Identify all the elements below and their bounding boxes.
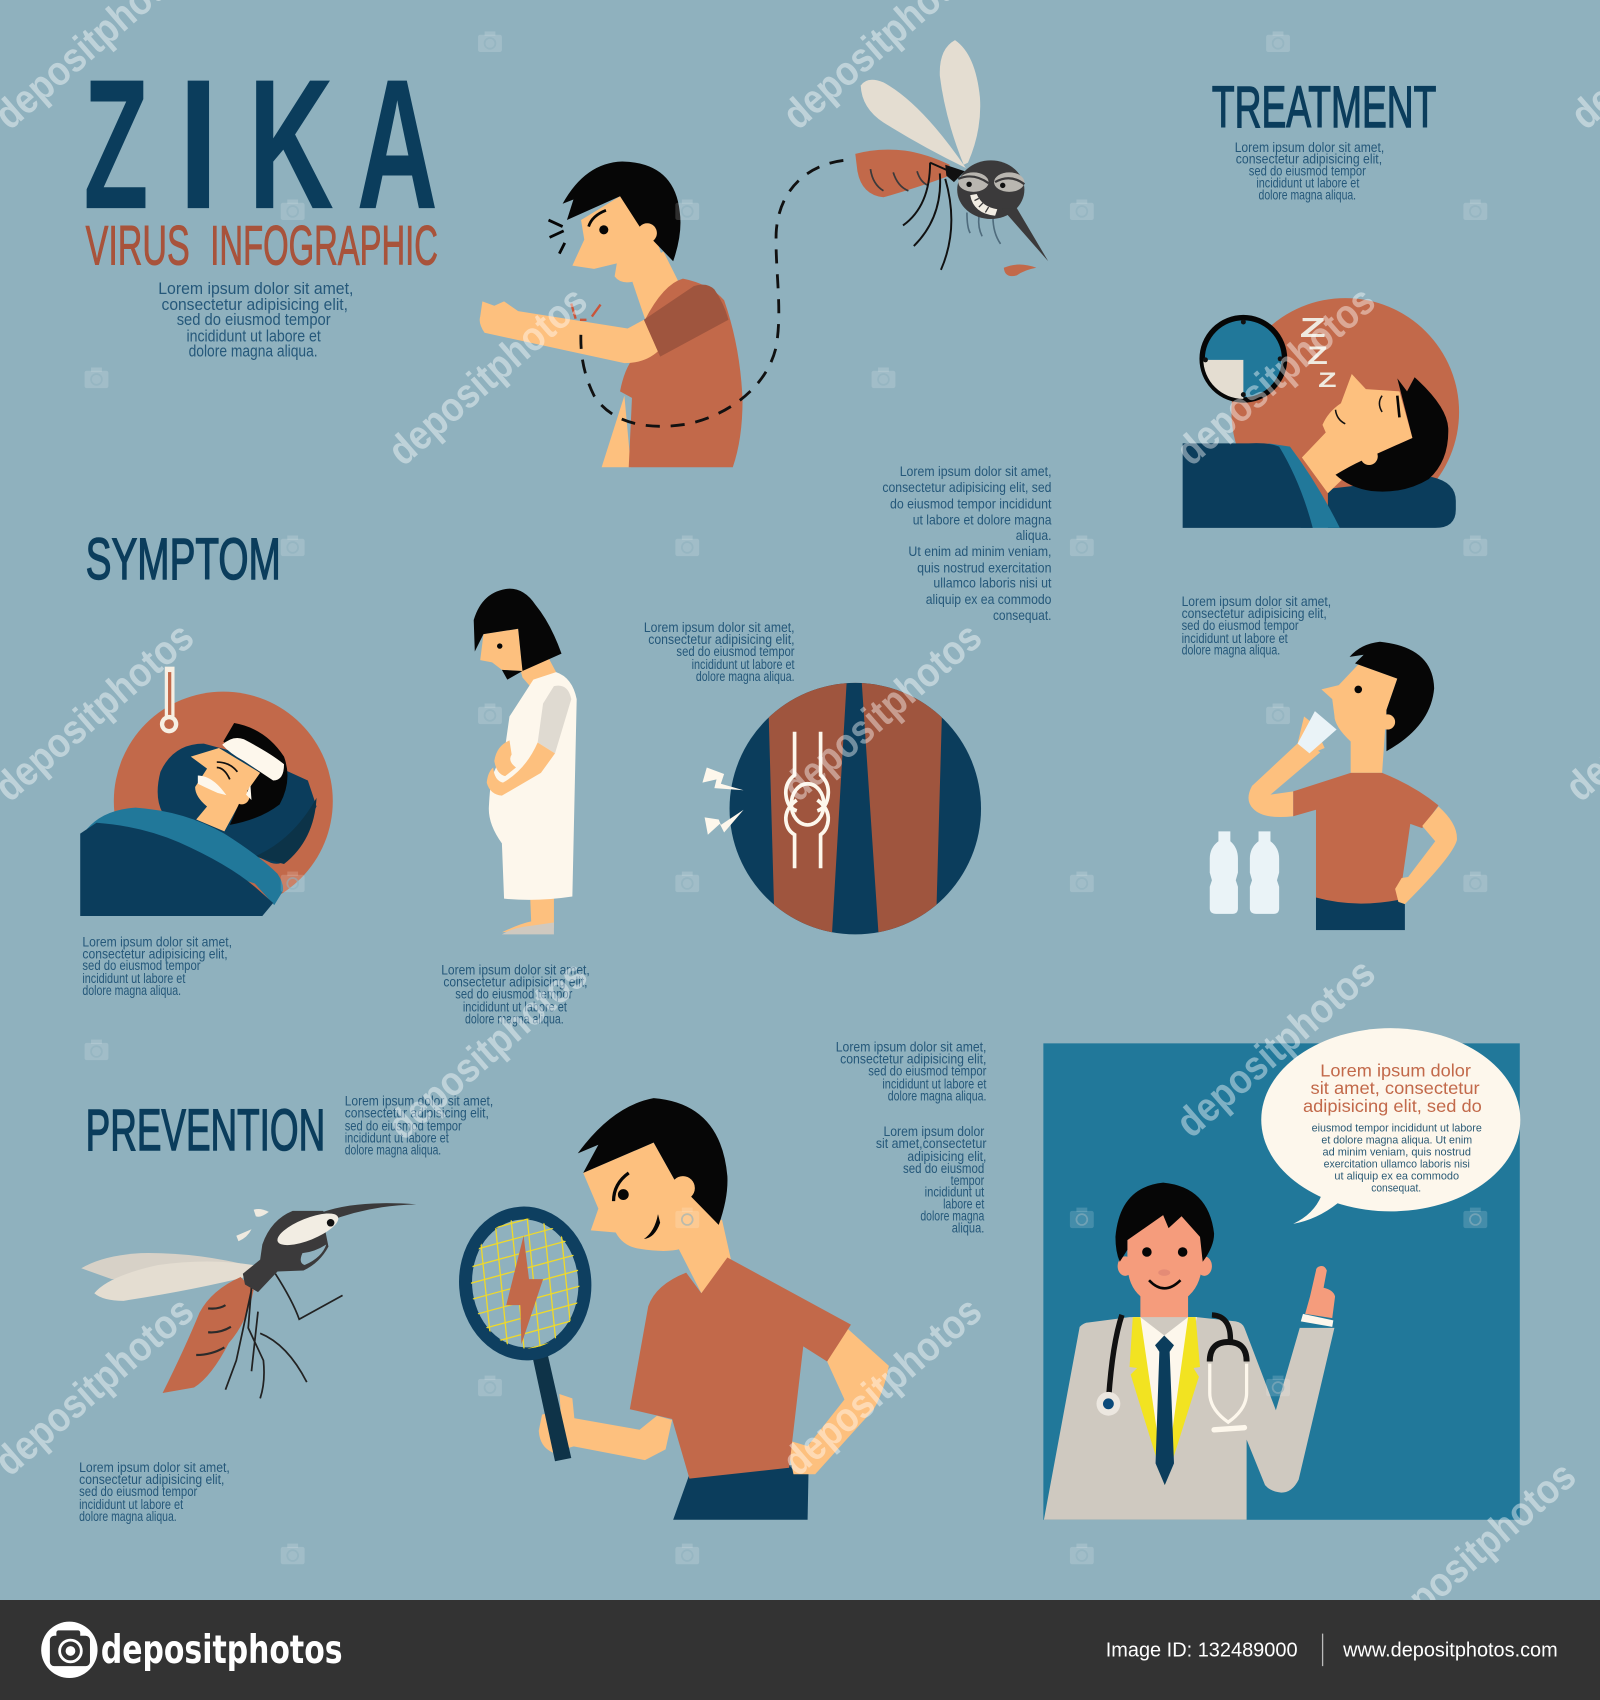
mid text block: Ut enim ad minim veniam, (908, 544, 1051, 559)
teeth (970, 194, 997, 216)
pregnant text: sed do eiusmod tempor (455, 986, 573, 1001)
narrow column text: sit amet,consectetur (876, 1136, 987, 1151)
hair (1336, 377, 1448, 492)
shirt (1293, 773, 1438, 904)
pregnant text (441, 963, 590, 1026)
bubble text: consequat. (1371, 1182, 1421, 1194)
snoring Zs: Z (1318, 367, 1337, 392)
pillow (158, 744, 317, 864)
narrow column text: tempor (951, 1173, 985, 1188)
intro text: dolore magna aliqua. (189, 343, 318, 361)
sick text: incididunt ut labore et (82, 971, 186, 986)
face (572, 196, 663, 282)
blood drop (1004, 264, 1036, 276)
wings (81, 1253, 251, 1279)
narrow column text: dolore magna (920, 1209, 985, 1224)
head (1118, 1256, 1133, 1276)
pillow (1328, 477, 1456, 528)
shirt (620, 279, 743, 467)
prevention text (345, 1094, 493, 1157)
racket handle (531, 1349, 571, 1461)
shirt (630, 1257, 851, 1479)
tie (1155, 1336, 1174, 1485)
hair (474, 589, 562, 680)
intro text: incididunt ut labore et (186, 327, 321, 345)
body and head (243, 1211, 328, 1292)
head (957, 160, 1024, 219)
treatment text 2: sed do eiusmod tempor (1182, 618, 1299, 633)
abdomen (855, 150, 950, 197)
racket man text: Lorem ipsum dolor sit amet, (836, 1039, 986, 1054)
intro text: sed do eiusmod tempor (177, 311, 331, 329)
pants (1316, 895, 1405, 930)
legs (502, 894, 554, 932)
knee text: incididunt ut labore et (692, 657, 795, 672)
raised arm (1248, 740, 1320, 817)
bubble heading (1303, 1060, 1482, 1116)
face (583, 1143, 722, 1251)
mid text block: consequat. (993, 608, 1051, 623)
bubble text (1312, 1123, 1482, 1194)
legs (225, 1274, 343, 1398)
racket man text (836, 1039, 987, 1103)
intro text: Lorem ipsum dolor sit amet, (158, 280, 353, 298)
mid text block: aliqua. (1016, 528, 1051, 543)
abdomen (163, 1277, 254, 1393)
illustration: biting mosquito (855, 40, 1048, 276)
subtitle: virus infographic (86, 214, 438, 276)
heading: symptom: SYMPTOM (86, 527, 281, 592)
thermometer (160, 667, 178, 733)
clock (1201, 318, 1285, 401)
sick text (82, 934, 232, 998)
narrow column text: adipisicing elit, (907, 1149, 986, 1164)
right arm (786, 1327, 889, 1474)
racket man text: incididunt ut labore et (882, 1076, 987, 1091)
subtitle: virus infographic: VIRUS (86, 214, 190, 276)
sick text: consectetur adipisicing elit, (82, 946, 228, 961)
narrow column text: incididunt ut (925, 1185, 984, 1200)
hair (563, 162, 680, 261)
title: ZIKA (83, 41, 438, 248)
watermark text: depositphotos (1167, 949, 1384, 1146)
footer logo: depositphotos (101, 1628, 343, 1673)
intro text: consectetur adipisicing elit, (162, 296, 348, 314)
subtitle: virus infographic: INFOGRAPHIC (210, 214, 438, 276)
heading: prevention: PREVENTION (86, 1098, 325, 1163)
heading: treatment: TREATMENT (1212, 75, 1436, 140)
hair (578, 1098, 727, 1225)
hair (223, 723, 287, 825)
arms (494, 740, 516, 776)
knee text: Lorem ipsum dolor sit amet, (644, 620, 795, 635)
sick text: dolore magna aliqua. (82, 983, 181, 998)
face (1302, 374, 1412, 493)
arm with fist (480, 301, 658, 363)
bubble text: ut aliquip ex ea commodo (1334, 1170, 1459, 1182)
watermark camera icons (85, 31, 1487, 1564)
title: ZIKA: A (357, 41, 438, 248)
other arm (1395, 807, 1457, 904)
neck (518, 656, 556, 694)
snoring Zs: Z (1300, 311, 1326, 343)
sweat drops (254, 1209, 269, 1217)
pants (673, 1463, 809, 1520)
bubble heading: Lorem ipsum dolor (1320, 1060, 1471, 1080)
footer bar (0, 1600, 1600, 1700)
treatment text: Lorem ipsum dolor sit amet, (1235, 140, 1384, 155)
sick text: Lorem ipsum dolor sit amet, (82, 934, 232, 949)
hair (1115, 1183, 1214, 1262)
pain bolts (702, 767, 744, 790)
mosquito text: consectetur adipisicing elit, (79, 1472, 224, 1487)
treatment text 2: dolore magna aliqua. (1182, 643, 1280, 658)
lab coat (1044, 1317, 1334, 1520)
pregnant text: incididunt ut labore et (463, 999, 567, 1014)
lapels (1130, 1317, 1165, 1485)
title: ZIKA: I (178, 41, 219, 248)
intro text (158, 280, 353, 361)
illustration: sick man in bed (80, 667, 333, 916)
knee text: dolore magna aliqua. (696, 669, 795, 684)
illustration: knee joint pain (702, 672, 981, 943)
treatment text: dolore magna aliqua. (1259, 187, 1356, 202)
neck and face (1321, 664, 1397, 773)
narrow column text: aliqua. (952, 1221, 984, 1236)
treatment text 2: consectetur adipisicing elit, (1182, 606, 1327, 621)
pregnant text: dolore magna aliqua. (465, 1011, 564, 1026)
treatment text: incididunt ut labore et (1256, 176, 1360, 191)
bubble text: exercitation ullamco laboris nisi (1324, 1158, 1470, 1170)
watermark text: depositphotos (774, 1287, 990, 1484)
treatment text: sed do eiusmod tempor (1249, 164, 1366, 179)
neck (1140, 1290, 1188, 1336)
face (191, 748, 260, 831)
dress (489, 672, 577, 900)
bubble text: ad minim veniam, quis nostrud (1322, 1147, 1471, 1159)
narrow column text: Lorem ipsum dolor (883, 1124, 985, 1139)
racket man text: consectetur adipisicing elit, (840, 1051, 986, 1066)
sick text: sed do eiusmod tempor (82, 958, 201, 973)
bubble heading: sit amet, consectetur (1311, 1078, 1480, 1098)
pregnant text: Lorem ipsum dolor sit amet, (441, 963, 590, 978)
watermark text: depositphotos (379, 277, 596, 474)
speech bubble (1261, 1028, 1520, 1224)
knee text (644, 620, 795, 684)
flight path: dashed line (581, 160, 843, 426)
mosquito text: dolore magna aliqua. (79, 1509, 177, 1524)
knee text: consectetur adipisicing elit, (648, 632, 795, 647)
racket head (461, 1203, 591, 1366)
bubble text: et dolore magna aliqua. Ut enim (1321, 1135, 1472, 1147)
illustration: scared mosquito (81, 1203, 416, 1398)
mid text block: quis nostrud exercitation (917, 560, 1051, 575)
prevention text: consectetur adipisicing elit, (345, 1106, 489, 1121)
racket man text: dolore magna aliqua. (888, 1088, 986, 1103)
narrow column text: sed do eiusmod (903, 1161, 984, 1176)
prevention text: Lorem ipsum dolor sit amet, (345, 1094, 493, 1109)
treatment text 2: Lorem ipsum dolor sit amet, (1182, 594, 1331, 609)
racket man text: sed do eiusmod tempor (868, 1063, 987, 1078)
illustration: man drinking water (1210, 642, 1457, 930)
towel (222, 738, 284, 780)
mid text block: consectetur adipisicing elit, sed (882, 480, 1051, 495)
snoring Zs (1300, 311, 1337, 392)
mosquito text: Lorem ipsum dolor sit amet, (79, 1460, 230, 1475)
hair (1350, 642, 1434, 751)
mid text block: ullamco laboris nisi ut (933, 576, 1052, 591)
joint outline (786, 732, 828, 868)
watermark text: depositphotos (1167, 277, 1384, 474)
prevention text: sed do eiusmod tempor (345, 1119, 462, 1134)
watermark text: depositphotos (774, 613, 990, 810)
title: ZIKA: Z (83, 41, 149, 248)
blanket (87, 808, 283, 905)
image id: Image ID: 132489000 (1106, 1639, 1298, 1661)
lightning bolt (506, 1236, 543, 1344)
prevention text: dolore magna aliqua. (345, 1142, 441, 1157)
title: ZIKA: K (248, 41, 334, 248)
mid text block (882, 464, 1052, 623)
stethoscope (1096, 1315, 1247, 1430)
prevention text: incididunt ut labore et (345, 1131, 449, 1146)
mid text block: aliquip ex ea commodo (926, 592, 1051, 607)
neck (678, 1220, 732, 1293)
left arm (572, 1416, 672, 1460)
treatment text 2 (1182, 594, 1331, 658)
mid text block: do eiusmod tempor incididunt (890, 496, 1052, 511)
treatment text: consectetur adipisicing elit, (1236, 152, 1382, 167)
blanket (1268, 443, 1340, 528)
illustration: pregnant woman (474, 589, 577, 934)
mid text block: ut labore et dolore magna (913, 513, 1052, 528)
panel: doctor (1043, 1043, 1520, 1520)
bottles (1210, 831, 1238, 914)
illustration: coughing man (480, 162, 743, 467)
mid text block: Lorem ipsum dolor sit amet, (900, 464, 1051, 479)
footer logo (41, 1622, 343, 1678)
knee text: sed do eiusmod tempor (676, 644, 795, 659)
narrow column text (876, 1124, 987, 1236)
mosquito text (79, 1460, 230, 1524)
mosquito text: incididunt ut labore et (79, 1497, 183, 1512)
illustration: sleeping man with clock (1183, 298, 1459, 528)
bubble text: eiusmod tempor incididunt ut labore (1312, 1123, 1482, 1135)
mosquito text: sed do eiusmod tempor (79, 1484, 198, 1499)
footer url: www.depositphotos.com (1342, 1639, 1558, 1661)
cup (1298, 711, 1337, 753)
bubble heading: adipisicing elit, sed do (1303, 1096, 1482, 1116)
raised hand (1305, 1266, 1335, 1318)
legs (903, 163, 951, 270)
treatment text 2: incididunt ut labore et (1182, 631, 1288, 646)
pregnant text: consectetur adipisicing elit, (443, 974, 588, 989)
wings (940, 40, 980, 165)
face (480, 629, 522, 671)
watermark text: depositphotos (379, 951, 596, 1148)
shirt (1133, 1317, 1197, 1485)
narrow column text: labore et (943, 1197, 984, 1212)
illustration: man with electric racket (461, 1098, 889, 1520)
snoring Zs: Z (1307, 342, 1328, 370)
treatment text (1235, 140, 1384, 202)
